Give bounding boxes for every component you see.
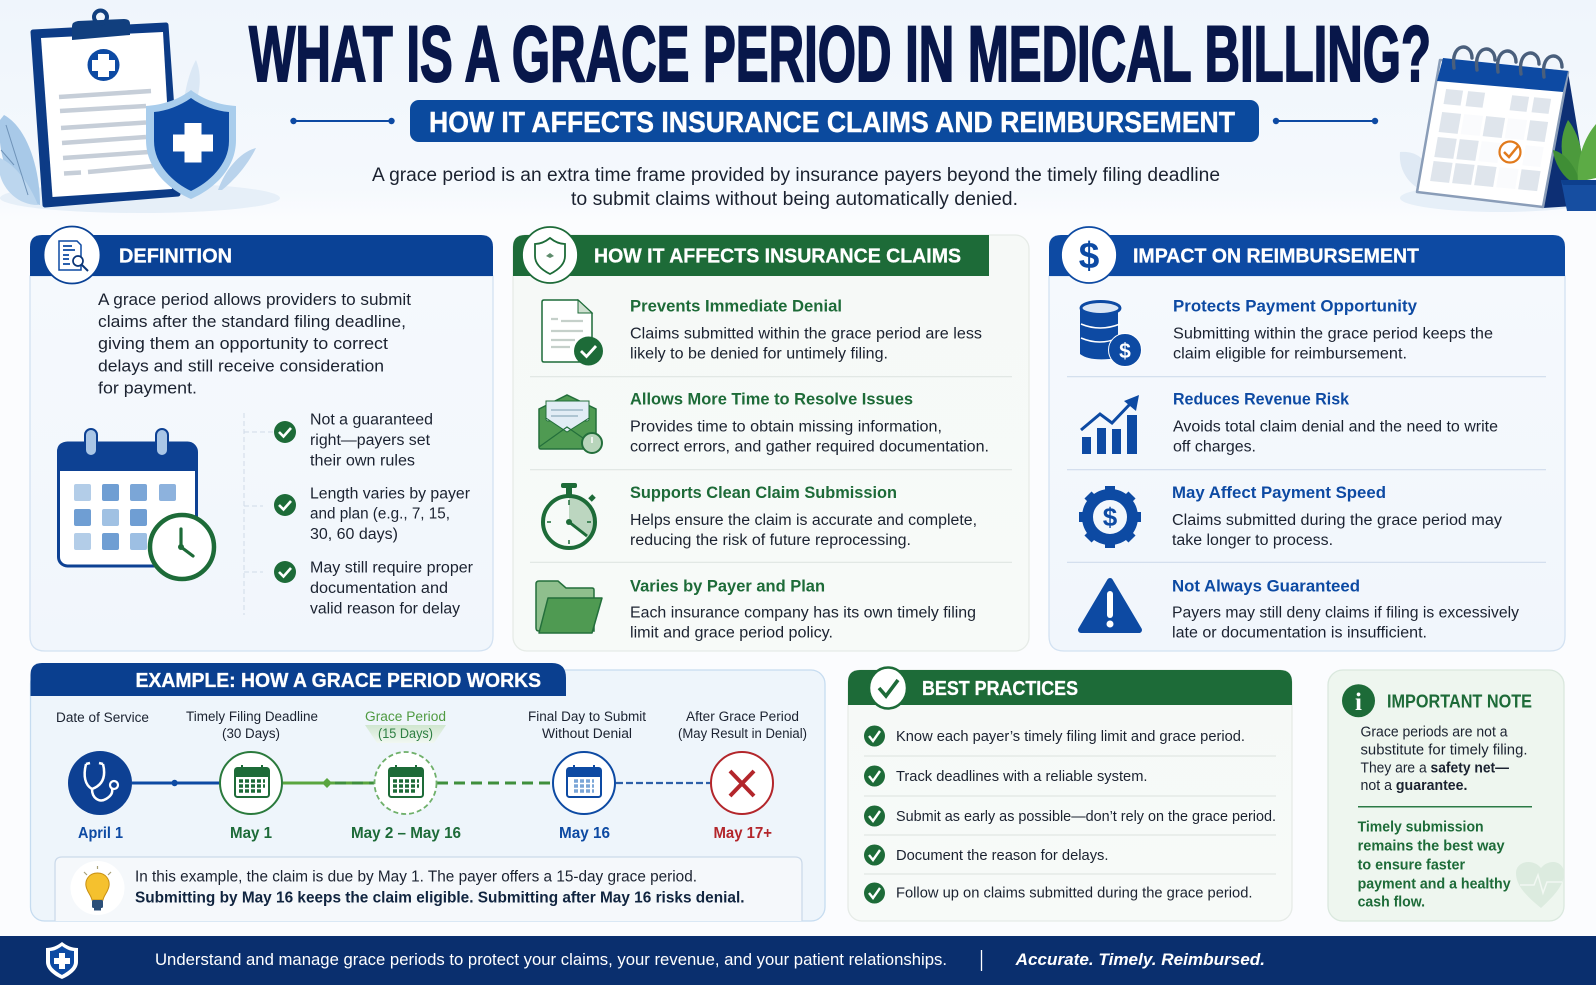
example explanation callout: In this example, the claim is due by May 1. The payer offers a 15-day grace period.: [135, 869, 697, 886]
item: varies by payer and plan: [536, 578, 976, 642]
bullet: documentation: May still require proper: [310, 560, 473, 576]
practice 5: [864, 882, 1252, 904]
step: after grace period: [678, 709, 807, 842]
item: reduces revenue risk: Reduces Revenue Risk: [1173, 390, 1350, 408]
note body: [1360, 725, 1528, 794]
step: final day to submit: [528, 709, 646, 842]
intro text: [372, 165, 1220, 210]
timeline connectors: [132, 778, 710, 788]
bullet: not a guaranteed right: right—payers set: [310, 432, 431, 449]
definition header bar: [30, 235, 493, 276]
subtitle banner: [290, 100, 1378, 142]
icon: shield badge: [522, 227, 578, 283]
step: timely filing deadline: [186, 709, 318, 842]
bullet: not a guaranteed right: [274, 412, 433, 470]
item: protects payment opportunity: Protects Payment Opportunity: [1173, 298, 1418, 316]
step: date of service: Date of Service: [56, 710, 149, 725]
step: grace period: Grace Period: [365, 709, 446, 724]
divider lines: [1067, 377, 1546, 562]
icon: warning triangle: [1081, 581, 1139, 630]
reimbursement heading: IMPACT ON REIMBURSEMENT: [1133, 244, 1419, 268]
claims heading: HOW IT AFFECTS INSURANCE CLAIMS: [594, 244, 961, 268]
item: not always guaranteed: [1081, 578, 1519, 642]
step: date of service: [56, 710, 149, 842]
illustration: clipboard with shield: [0, 10, 280, 213]
bullet: length varies: 30, 60 days): [310, 526, 398, 543]
icon: heart watermark: [1516, 862, 1564, 908]
item: prevents immediate denial: likely to be denied for untimely filing.: [630, 346, 888, 362]
bullet: documentation: [274, 560, 473, 618]
step: after grace period: May 17+: [714, 825, 772, 842]
item: allows more time: Allows More Time to Resolve Issues: [630, 390, 913, 408]
note body: They are a safety net—: [1360, 760, 1510, 776]
panel: how it affects insurance claims: [513, 227, 1029, 651]
illustration: desk calendar and plant: [1400, 47, 1596, 212]
panel: best practices: [848, 668, 1292, 921]
panel: important note: [1328, 670, 1564, 921]
practice 5: Follow up on claims submitted during the grace period.: [896, 886, 1252, 902]
item: protects payment opportunity: claim eligible for reimbursement.: [1173, 346, 1407, 362]
bullet: length varies: and plan (e.g., 7, 15,: [310, 506, 450, 522]
icon: rising bar chart: [1081, 395, 1139, 454]
item: may affect payment speed: May Affect Payment Speed: [1172, 484, 1386, 502]
example explanation callout: [55, 857, 802, 921]
panel: impact on reimbursement: [1049, 227, 1565, 651]
practice 2: [864, 766, 1148, 786]
icon: dollar gear: [1079, 486, 1141, 548]
definition paragraph: claims after the standard filing deadline,: [98, 312, 406, 331]
practice 4: [864, 844, 1108, 866]
step: after grace period: After Grace Period: [686, 709, 799, 724]
bullet: documentation: documentation and: [310, 580, 448, 597]
icon: document check: [542, 300, 603, 366]
intro text: to submit claims without being automatically denied.: [571, 189, 1018, 210]
step: timely filing deadline: May 1: [230, 825, 272, 842]
divider lines: [530, 377, 1012, 562]
item: varies by payer and plan: Varies by Payer and Plan: [630, 578, 825, 596]
practice 3: [864, 806, 1276, 826]
bullet: documentation: valid reason for delay: [310, 600, 460, 618]
note conclusion: cash flow.: [1358, 895, 1425, 911]
definition paragraph: for payment.: [98, 378, 197, 398]
example header: EXAMPLE: HOW A GRACE PERIOD WORKS: [136, 669, 541, 692]
icon: calendar with clock: [57, 429, 214, 579]
item: protects payment opportunity: [1080, 298, 1493, 366]
note body: substitute for timely filing.: [1360, 742, 1528, 758]
note conclusion: remains the best way: [1358, 839, 1505, 855]
item: varies by payer and plan: Each insurance company has its own timely filing: [630, 604, 976, 622]
note body: not a guarantee.: [1360, 778, 1468, 794]
practice 4: Document the reason for delays.: [896, 848, 1108, 864]
icon: document with magnifier: [44, 226, 100, 284]
icon: info: i: [1355, 689, 1362, 716]
bullet: not a guaranteed right: Not a guaranteed: [310, 412, 433, 428]
practice 2: Track deadlines with a reliable system.: [896, 769, 1148, 785]
note body: Grace periods are not a: [1360, 725, 1508, 741]
item: not always guaranteed: Payers may still deny claims if filing is excessively: [1172, 604, 1519, 622]
item: prevents immediate denial: Prevents Immediate Denial: [630, 298, 842, 316]
icon: footer shield: [46, 942, 78, 979]
item: may affect payment speed: Claims submitted during the grace period may: [1172, 512, 1502, 529]
footer band: Accurate. Timely. Reimbursed.: [1015, 950, 1265, 969]
item: varies by payer and plan: limit and grace period policy.: [630, 624, 833, 642]
item: reduces revenue risk: Avoids total claim denial and the need to write: [1173, 418, 1498, 436]
panel: definition: [30, 226, 493, 651]
step: grace period: [351, 709, 461, 842]
step: grace period: (15 Days): [378, 726, 433, 741]
claims header bar: [513, 235, 989, 276]
note conclusion: Timely submission: [1358, 820, 1484, 836]
bullet: length varies: [274, 486, 470, 543]
item: reduces revenue risk: [1081, 390, 1498, 456]
icon: info: [1342, 684, 1375, 717]
icon: stopwatch: [543, 483, 595, 548]
step: timely filing deadline: (30 Days): [222, 726, 280, 741]
step: final day to submit: Without Denial: [542, 726, 632, 741]
icon: dollar badge: [1061, 227, 1117, 283]
item: allows more time: Provides time to obtain missing information,: [630, 418, 942, 436]
best practices header: [848, 668, 1292, 708]
item: may affect payment speed: [1079, 484, 1502, 549]
step: timely filing deadline: Timely Filing Deadline: [186, 709, 318, 724]
item: protects payment opportunity: Submitting within the grace period keeps the: [1173, 326, 1493, 342]
icon: coins: [1080, 302, 1142, 366]
step: grace period: May 2 – May 16: [351, 825, 461, 842]
icon: dollar badge: $: [1079, 235, 1100, 276]
item: supports clean claim submission: reducing the risk of future reprocessing.: [630, 532, 911, 549]
item: reduces revenue risk: off charges.: [1173, 438, 1256, 456]
definition paragraph: A grace period allows providers to submit: [98, 290, 411, 309]
note conclusion: to ensure faster: [1358, 857, 1465, 873]
subtitle banner: HOW IT AFFECTS INSURANCE CLAIMS AND REIMBURSEMENT: [429, 107, 1235, 139]
item: allows more time: [539, 390, 989, 456]
practice 1: [864, 726, 1245, 746]
step: final day to submit: Final Day to Submit: [528, 709, 646, 724]
footer band: [0, 936, 1596, 985]
practice 3: Submit as early as possible—don’t rely on the grace period.: [896, 809, 1276, 825]
icon: coins: $: [1119, 340, 1131, 363]
definition paragraph: delays and still receive consideration: [98, 356, 384, 376]
item: prevents immediate denial: [542, 298, 982, 366]
footer band: Understand and manage grace periods to protect your claims, your revenue, and your patient relationships.: [155, 951, 947, 969]
step: final day to submit: May 16: [559, 825, 610, 842]
item: not always guaranteed: late or documentation is insufficient.: [1172, 624, 1427, 642]
step: date of service: April 1: [78, 825, 123, 842]
example explanation callout: Submitting by May 16 keeps the claim eligible. Submitting after May 16 risks denial.: [135, 890, 744, 907]
item: may affect payment speed: take longer to process.: [1172, 532, 1333, 549]
intro text: A grace period is an extra time frame provided by insurance payers beyond the timely filing deadline: [372, 165, 1220, 186]
reimbursement header bar: [1049, 235, 1565, 276]
icon: dollar gear: $: [1103, 502, 1118, 532]
note conclusion: payment and a healthy: [1358, 876, 1511, 892]
item: supports clean claim submission: Helps ensure the claim is accurate and complete,: [630, 512, 977, 529]
divider lines: [864, 756, 1276, 874]
note heading: IMPORTANT NOTE: [1387, 692, 1532, 712]
definition paragraph: giving them an opportunity to correct: [98, 334, 388, 353]
practice 1: Know each payer’s timely filing limit and grace period.: [896, 729, 1245, 745]
item: prevents immediate denial: Claims submitted within the grace period are less: [630, 326, 982, 342]
dashed connector: [244, 413, 273, 615]
example header: [30, 663, 566, 696]
item: allows more time: correct errors, and gather required documentation.: [630, 438, 989, 456]
bullet: length varies: Length varies by payer: [310, 486, 470, 502]
item: not always guaranteed: Not Always Guaranteed: [1172, 578, 1360, 596]
item: supports clean claim submission: Supports Clean Claim Submission: [630, 484, 897, 502]
panel: example timeline: [30, 663, 825, 921]
definition paragraph: [98, 290, 411, 398]
best practices header: BEST PRACTICES: [922, 677, 1078, 700]
icon: light bulb: [70, 861, 124, 915]
note conclusion: [1358, 820, 1511, 911]
step: after grace period: (May Result in Denial): [678, 726, 807, 741]
definition heading: DEFINITION: [119, 244, 232, 268]
icon: envelope with clock: [539, 395, 602, 453]
item: supports clean claim submission: [543, 483, 977, 549]
icon: folder: [536, 581, 602, 633]
bullet: not a guaranteed right: their own rules: [310, 452, 415, 470]
